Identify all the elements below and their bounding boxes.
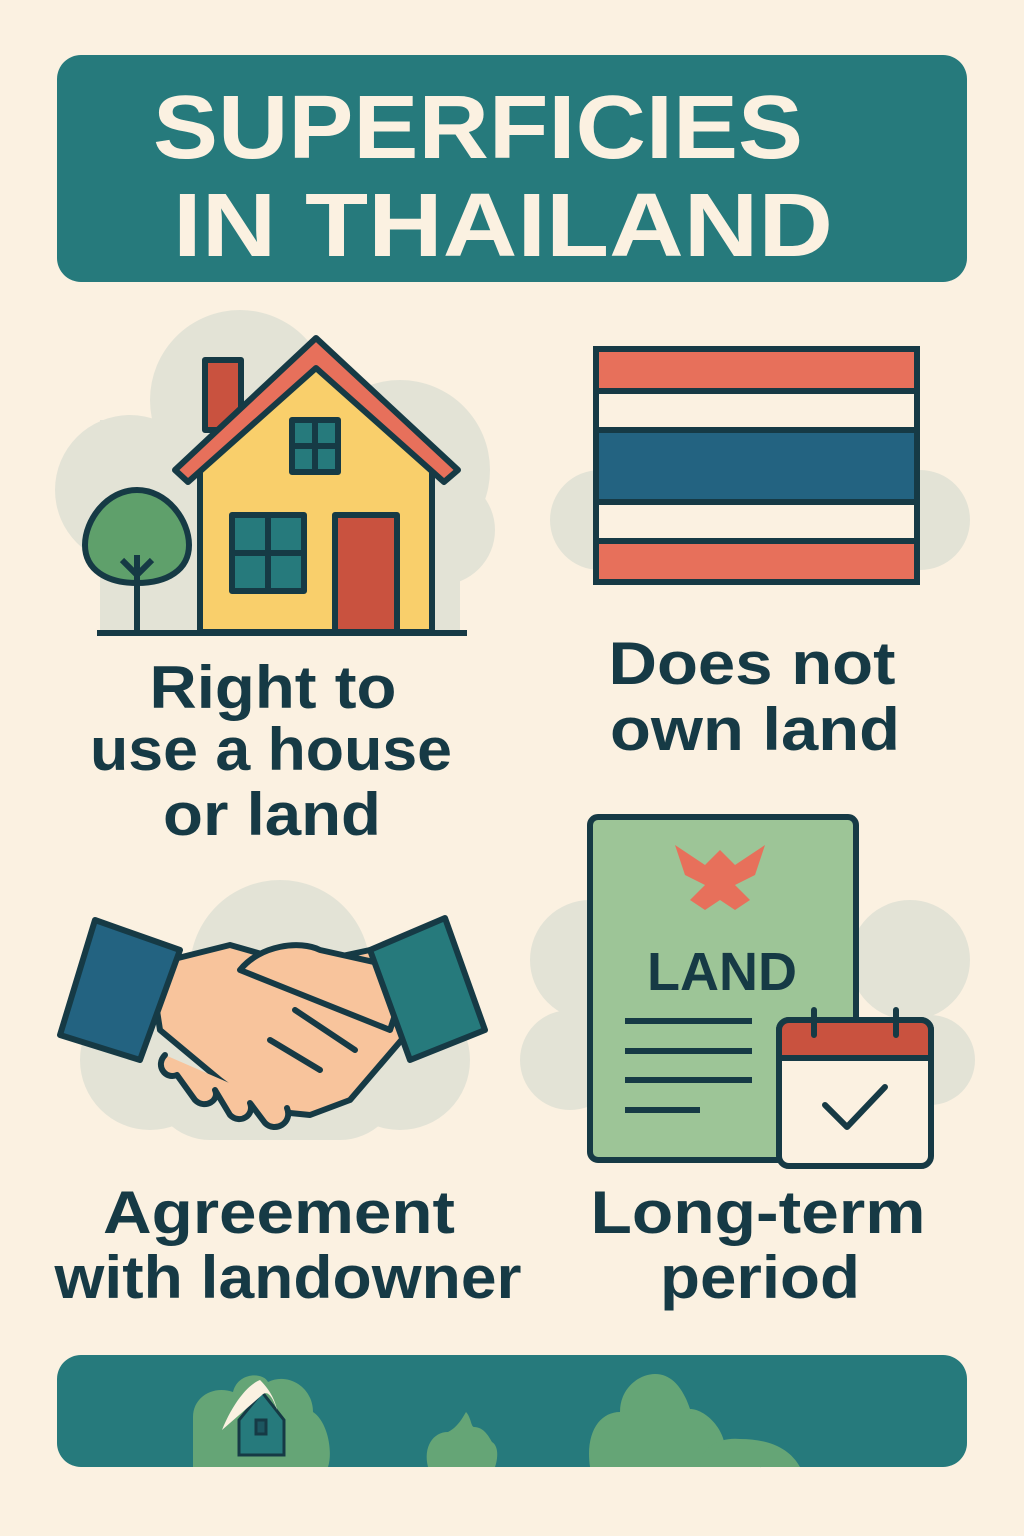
icon: small house — [239, 1392, 284, 1455]
icon: background cloud — [55, 310, 495, 630]
icon: background cloud — [550, 460, 970, 580]
text: right to use: or land — [163, 781, 381, 848]
text: long-term: Long-term — [590, 1179, 926, 1246]
panel: handshake — [53, 880, 522, 1311]
text: long-term: period — [660, 1244, 860, 1311]
icon: house — [85, 338, 467, 633]
text: long-term — [590, 1179, 926, 1311]
title — [153, 78, 833, 276]
text: agreement: with landowner — [53, 1244, 522, 1311]
icon: background cloud — [520, 900, 975, 1110]
text: right to use: Right to — [150, 654, 396, 721]
text: does not own land: own land — [610, 696, 900, 763]
panel: house — [55, 310, 495, 848]
icon: background cloud — [80, 880, 470, 1140]
title: IN THAILAND — [173, 176, 833, 276]
text: right to use — [90, 654, 452, 848]
icon: thai flag — [596, 349, 917, 582]
icon: land deed: LAND — [647, 942, 797, 1002]
title: SUPERFICIES — [153, 78, 803, 178]
text: does not own land — [608, 630, 900, 763]
text: does not own land: Does not — [608, 630, 896, 697]
icon: handshake — [60, 918, 485, 1127]
footer banner — [57, 1355, 967, 1467]
panel: land document — [520, 817, 975, 1311]
text: agreement: Agreement — [103, 1179, 455, 1246]
icon: land deed — [590, 817, 931, 1166]
text: agreement — [53, 1179, 522, 1311]
text: right to use: use a house — [90, 716, 452, 783]
title banner — [57, 55, 967, 282]
panel: flag — [550, 349, 970, 763]
